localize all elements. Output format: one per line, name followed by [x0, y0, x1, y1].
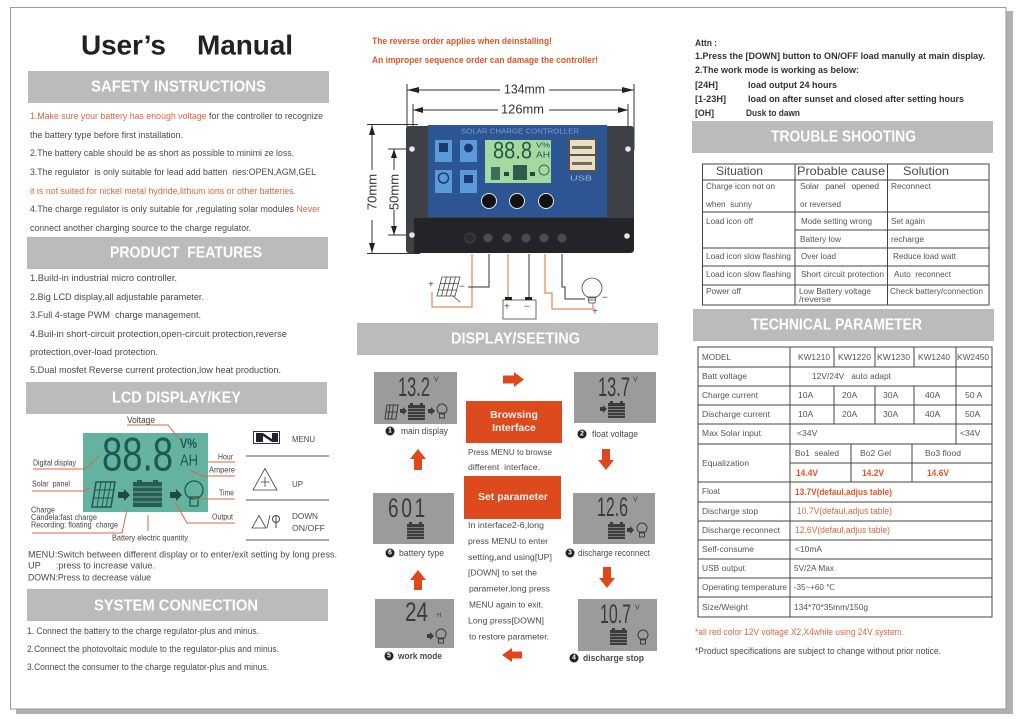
text block: key descriptions: UP :press to increase value.: [28, 560, 155, 572]
text block: key descriptions: DOWN:Press to decrease value: [28, 572, 151, 584]
text block: attention notes: Attn :: [695, 38, 717, 48]
caption 5: 5: [387, 652, 391, 660]
icon: light bulb: −: [602, 292, 608, 304]
icon: output arrow: [170, 489, 182, 501]
table: technical parameter: 12V/24V auto adapt: [812, 371, 892, 381]
table: trouble shooting: Auto reconnect: [894, 269, 952, 279]
panel: display/setting flow: [357, 323, 658, 663]
table: trouble shooting: Short circuit protection: [801, 269, 884, 279]
text block: connection steps: 1. Connect the battery to the charge regulator-plus and minus.: [27, 626, 259, 636]
table: trouble shooting: Load icon off: [706, 216, 754, 226]
key: up: [246, 468, 329, 500]
table: trouble shooting: Reduce load watt: [893, 251, 957, 261]
device LCD: AH: [536, 150, 550, 160]
table: technical parameter: MODEL: [702, 352, 731, 362]
callout labels: Hour: [218, 452, 233, 462]
text block: safety list: connect another charging source to the charge regulator.: [30, 223, 251, 233]
table: technical parameter: KW1210: [798, 352, 830, 362]
table: technical parameter: 12.6V(defaul,adjus table): [795, 525, 890, 535]
heading: technical parameter: [693, 309, 994, 341]
text block: set parameter instructions: [DOWN] to set the: [468, 568, 538, 578]
screen 6: battery type: 601: [388, 493, 428, 523]
caption 1: 1: [388, 428, 392, 434]
callout labels: Candela:fast charge: [31, 513, 98, 522]
table: trouble shooting: Mode setting wrong: [801, 216, 872, 226]
callout labels: Time: [219, 488, 234, 498]
device LCD: 88.8: [493, 138, 532, 164]
table: trouble shooting: Load icon slow flashing: [706, 269, 791, 279]
text block: feature list: 1.Build-in industrial micro controller.: [30, 273, 177, 283]
table: technical parameter: Float: [702, 486, 721, 496]
panel: LCD display and keys: [26, 382, 337, 584]
text block: set parameter instructions: In interface2-6,long: [468, 521, 544, 530]
device buttons: [482, 194, 554, 208]
table: technical parameter: KW1230: [877, 352, 910, 362]
text block: feature list: protection,over-load protection.: [30, 347, 158, 357]
table: technical parameter: <34V: [960, 428, 981, 438]
heading: safety instructions: [28, 71, 329, 103]
table: technical parameter: Operating temperature: [702, 582, 787, 592]
panel: product features: [27, 237, 328, 375]
callout labels: Recording: floating charge: [31, 520, 118, 530]
text block: attention notes: load on after sunset and closed after setting hours: [748, 94, 964, 104]
caption 6: 6: [388, 550, 392, 556]
device LCD: [485, 138, 551, 183]
arrow: down 2: [599, 567, 615, 588]
table: technical parameter: Discharge current: [702, 409, 771, 419]
table: trouble shooting: Probable cause: [797, 164, 885, 178]
table: technical parameter: 134*70*35mm/150g: [794, 602, 868, 612]
box: browsing interface: Browsing: [490, 409, 538, 421]
screen 1: main display: [374, 372, 457, 424]
text block: set parameter instructions: [468, 521, 552, 642]
text block: safety list: 2.The battery cable should be as short as possible to minimi ze loss.: [30, 148, 294, 158]
callout labels: Digital display: [33, 458, 76, 468]
screen 5: work mode: H: [437, 613, 441, 619]
screen 1: main display: V: [434, 376, 439, 384]
feature icons: [435, 140, 477, 193]
arrow: left: [502, 648, 522, 662]
table: technical parameter: 30A: [883, 390, 899, 400]
table: trouble shooting: when sunny: [705, 199, 753, 209]
warning text: The reverse order applies when deinstalling!: [372, 36, 552, 46]
callout labels: Voltage: [127, 415, 155, 425]
table: trouble shooting: Low Battery voltage: [799, 286, 871, 296]
table: trouble shooting: Charge icon not on: [706, 181, 775, 191]
table: technical parameter: [698, 347, 992, 617]
caption 4: discharge stop: [583, 653, 644, 663]
table: technical parameter: Discharge stop: [702, 506, 758, 516]
screen 2: float voltage: 13.7: [598, 372, 630, 402]
key: down on/off: [246, 511, 329, 540]
panel: trouble shooting: [692, 121, 993, 305]
table: trouble shooting: Check battery/connection: [890, 286, 983, 296]
table: technical parameter: Size/Weight: [702, 602, 749, 612]
box: browsing interface: Interface: [492, 422, 536, 434]
terminal block: [414, 218, 634, 253]
box: set parameter: [464, 476, 561, 519]
text block: connection steps: [27, 626, 279, 672]
table: technical parameter: Charge current: [702, 390, 759, 400]
table: technical parameter: 30A: [883, 409, 899, 419]
table: technical parameter: USB output: [702, 563, 746, 573]
icon: battery: +: [504, 302, 510, 312]
table: technical parameter: 10.7V(defaul,adjus table): [797, 506, 892, 516]
LCD diagram: 88.8: [102, 428, 173, 480]
text block: connection steps: 3.Connect the consumer to the charge regulator-plus and minus.: [27, 662, 269, 672]
dimension labels: 70mm: [364, 174, 380, 210]
dimension labels: [364, 82, 545, 210]
caption 4: 4: [572, 654, 576, 662]
heading: trouble shooting: [692, 121, 993, 153]
table: trouble shooting: [702, 164, 989, 305]
text block: feature list: [30, 273, 287, 375]
footnotes: [695, 627, 941, 656]
table: technical parameter: Bo2 Gel: [860, 448, 891, 458]
dimension drawing: [364, 82, 634, 254]
table: technical parameter: Batt voltage: [702, 371, 747, 381]
screen 3: discharge reconnect: V: [633, 496, 638, 504]
screen 6: battery type: [373, 493, 454, 544]
heading: LCD display/key: LCD DISPLAY/KEY: [112, 390, 241, 406]
positive wires: [432, 254, 593, 309]
text block: browsing instructions: Press MENU to browse: [468, 447, 552, 457]
table: technical parameter: Discharge reconnect: [702, 525, 781, 535]
caption 3: discharge reconnect: [578, 548, 650, 558]
table: technical parameter: <34V: [797, 428, 818, 438]
text block: safety list: 4.The charge regulator is only suitable for ,regulating solar modules Never: [30, 204, 320, 214]
table: trouble shooting: /reverse: [799, 294, 831, 304]
screen 3: discharge reconnect: [573, 492, 655, 544]
table: technical parameter: 40A: [925, 409, 941, 419]
text block: set parameter instructions: press MENU to enter: [468, 537, 548, 546]
text block: attention notes: [OH]: [695, 108, 714, 118]
screen 3: discharge reconnect: 12.6: [597, 492, 628, 522]
text block: set parameter instructions: Long press[DOWN]: [468, 616, 544, 626]
footnotes: *Product specifications are subject to change without prior notice.: [695, 646, 941, 656]
table: technical parameter: 40A: [925, 390, 941, 400]
panel: system connection: [27, 589, 328, 672]
table: technical parameter: Equalization: [702, 458, 749, 468]
text block: attention notes: 1.Press the [DOWN] button to ON/OFF load manully at main display.: [695, 51, 985, 61]
arrow: up 2: [410, 449, 426, 470]
table: technical parameter: 5V/2A Max: [794, 563, 835, 573]
table: trouble shooting: Reconnect: [891, 181, 932, 191]
dimension lines: [367, 84, 634, 254]
arrow: up 1: [410, 570, 426, 590]
text block: safety list: it is not suited for nickel metal hydride,lithium ions or other batteries.: [30, 186, 296, 196]
blue faceplate: [428, 125, 607, 217]
table: trouble shooting: Set again: [891, 216, 925, 226]
table: technical parameter: 20A: [842, 409, 858, 419]
screen 5: work mode: [375, 597, 454, 648]
text block: safety list: 1.Make sure your battery has enough voltage for the controller to recognize: [30, 111, 323, 121]
arrow: right: [503, 372, 524, 387]
text block: set parameter instructions: parameter,long press: [469, 584, 550, 594]
text block: safety list: the battery type before first installation.: [30, 130, 183, 140]
text block: attention notes: 2.The work mode is working as below:: [695, 65, 859, 75]
title: User’s: [81, 30, 166, 60]
icon: load bulb: [185, 481, 203, 506]
text block: feature list: 5.Dual mosfet Reverse current protection,low heat production.: [30, 365, 281, 375]
table: trouble shooting: Load icon slow flashing: [706, 251, 791, 261]
arrow: down 1: [598, 449, 614, 470]
text block: attention notes: [24H]: [695, 80, 718, 90]
screen 2: float voltage: [574, 372, 656, 423]
warning text: An improper sequence order can damage the controller!: [372, 55, 598, 65]
table: technical parameter: 10A: [798, 390, 814, 400]
device body: [406, 126, 634, 253]
text block: set parameter instructions: to restore parameter.: [469, 632, 549, 642]
text block: safety list: [30, 111, 323, 233]
text block: key descriptions: MENU:Switch between different display or to enter/exit setting by long press.: [28, 550, 337, 560]
icon: charge arrow: [118, 489, 130, 501]
device LCD: V%: [536, 142, 550, 150]
table: trouble shooting: Situation: [716, 164, 763, 178]
screen 1: main display: 13.2: [398, 372, 430, 402]
text block: feature list: 4.Buil-in short-circuit protection,open-circuit protection,reverse: [30, 329, 287, 339]
text block: connection steps: 2.Connect the photovoltaic module to the regulator-plus and minus.: [27, 644, 279, 654]
callout lines: [32, 425, 235, 533]
screen 2: float voltage: V: [633, 376, 638, 384]
LCD diagram: AH: [180, 452, 198, 470]
title: Manual: [197, 30, 293, 60]
heading: LCD display/key: [26, 382, 327, 414]
panel: safety instructions: [28, 71, 329, 233]
heading: product features: [27, 237, 328, 269]
icon: battery: [503, 297, 536, 319]
table: technical parameter: <10mA: [795, 544, 822, 554]
text block: browsing instructions: different interface.: [468, 462, 540, 472]
dimension labels: 134mm: [504, 82, 545, 96]
negative wires: [468, 254, 585, 299]
key: down on/off: DOWN: [292, 511, 318, 521]
caption 2: 2: [580, 430, 584, 438]
key: menu: [246, 432, 329, 456]
table: technical parameter: KW2450: [957, 352, 989, 362]
table: trouble shooting: Power off: [706, 286, 742, 296]
table: trouble shooting: or reversed: [800, 199, 841, 209]
table: technical parameter: KW1220: [838, 352, 871, 362]
LCD diagram: V%: [180, 435, 197, 451]
LCD diagram: [83, 428, 208, 512]
key: up: UP: [292, 479, 303, 489]
text block: set parameter instructions: MENU again to exit,: [469, 600, 543, 610]
text block: key descriptions: [28, 550, 337, 584]
table: technical parameter: -35~+60 ℃: [794, 582, 835, 592]
text block: feature list: 3.Full 4-stage PWM charge management.: [30, 310, 201, 320]
text block: attention notes: Dusk to dawn: [746, 108, 800, 118]
screen 4: discharge stop: V: [635, 604, 640, 612]
icon: light bulb: +: [592, 306, 598, 318]
key: menu: MENU: [292, 434, 315, 444]
callout labels: Solar panel: [32, 480, 70, 488]
heading: system connection: [27, 589, 328, 621]
table: technical parameter: 10A: [798, 409, 814, 419]
box: browsing interface: [466, 401, 562, 443]
table: technical parameter: Bo3 flood: [925, 448, 961, 458]
box: set parameter: Set parameter: [478, 491, 548, 503]
caption 3: 3: [568, 550, 572, 556]
text block: feature list: 2.Big LCD display,all adjustable parameter.: [30, 292, 204, 302]
icon: solar panel: [92, 482, 115, 507]
icon: solar panel: +: [428, 280, 434, 290]
icon: solar panel: [428, 277, 465, 302]
table: technical parameter: 14.4V: [796, 468, 818, 478]
terminal screws: [465, 233, 566, 243]
icon: battery level: [133, 480, 162, 507]
table: technical parameter: 50 A: [965, 390, 982, 400]
text block: attention notes: [1-23H]: [695, 94, 726, 104]
table: trouble shooting: recharge: [891, 234, 924, 244]
dimension labels: 126mm: [501, 102, 544, 116]
wiring diagram: [428, 254, 608, 319]
table: trouble shooting: Over load: [801, 251, 836, 261]
heading: technical parameter: TECHNICAL PARAMETER: [751, 316, 922, 334]
heading: trouble shooting: TROUBLE SHOOTING: [771, 128, 916, 146]
screen 4: discharge stop: 10.7: [600, 599, 631, 629]
caption 1: main display: [401, 426, 448, 436]
table: technical parameter: 50A: [965, 409, 981, 419]
caption 6: battery type: [399, 548, 444, 558]
key: down on/off: ON/OFF: [292, 523, 325, 533]
warning text: [372, 36, 598, 65]
footnotes: *all red color 12V voltage X2,X4while using 24V system.: [695, 627, 904, 637]
table: trouble shooting: Battery low: [800, 234, 842, 244]
panel: technical parameter: [693, 309, 994, 656]
icon: battery: −: [524, 302, 530, 312]
dimension arrowheads: [369, 87, 634, 253]
text block: attention notes: load output 24 hours: [748, 80, 837, 90]
mounting holes: [409, 146, 631, 239]
icon: light bulb: [582, 278, 608, 318]
text block: attention notes: [695, 38, 985, 118]
heading: display/seeting: [357, 323, 658, 355]
dimension labels: 50mm: [386, 174, 402, 210]
callout labels: Battery electric quantity: [112, 534, 188, 542]
heading: product features: PRODUCT FEATURES: [110, 244, 262, 262]
callout labels: Output: [212, 512, 234, 522]
table: technical parameter: Self-consume: [702, 544, 754, 554]
screen 4: discharge stop: [578, 599, 657, 651]
table: technical parameter: KW1240: [918, 352, 950, 362]
heading: system connection: SYSTEM CONNECTION: [94, 598, 258, 614]
title: [81, 30, 293, 60]
caption 2: float voltage: [592, 429, 638, 439]
USB ports: USB: [570, 176, 592, 182]
controller device: [406, 125, 634, 253]
callout labels: [31, 415, 236, 542]
table: technical parameter: 14.2V: [862, 468, 884, 478]
USB ports: [568, 138, 597, 182]
caption 5: work mode: [397, 651, 442, 661]
table: technical parameter: 14.6V: [927, 468, 949, 478]
table: trouble shooting: Solution: [903, 164, 949, 178]
callout labels: Ampere: [209, 466, 236, 474]
table: technical parameter: 13.7V(defaul,adjus table): [795, 487, 892, 497]
heading: safety instructions: SAFETY INSTRUCTIONS: [91, 78, 266, 96]
faceplate title: SOLAR CHARGE CONTROLLER: [461, 128, 579, 136]
table: technical parameter: Max Solar input: [702, 428, 762, 438]
table: technical parameter: 20A: [842, 390, 858, 400]
icon: solar panel: −: [459, 282, 465, 292]
screen 5: work mode: 24: [405, 597, 428, 627]
heading: display/seeting: DISPLAY/SEETING: [451, 330, 580, 348]
table: trouble shooting: Solar panel opened: [800, 181, 879, 191]
text block: set parameter instructions: setting,and using[UP]: [468, 553, 552, 562]
table: technical parameter: Bo1 sealed: [795, 448, 839, 458]
text block: browsing instructions: [468, 447, 552, 472]
text block: safety list: 3.The regulator is only suitable for lead add batten ries:OPEN,AGM,GEL: [30, 167, 316, 177]
callout labels: Charge: [31, 506, 55, 514]
